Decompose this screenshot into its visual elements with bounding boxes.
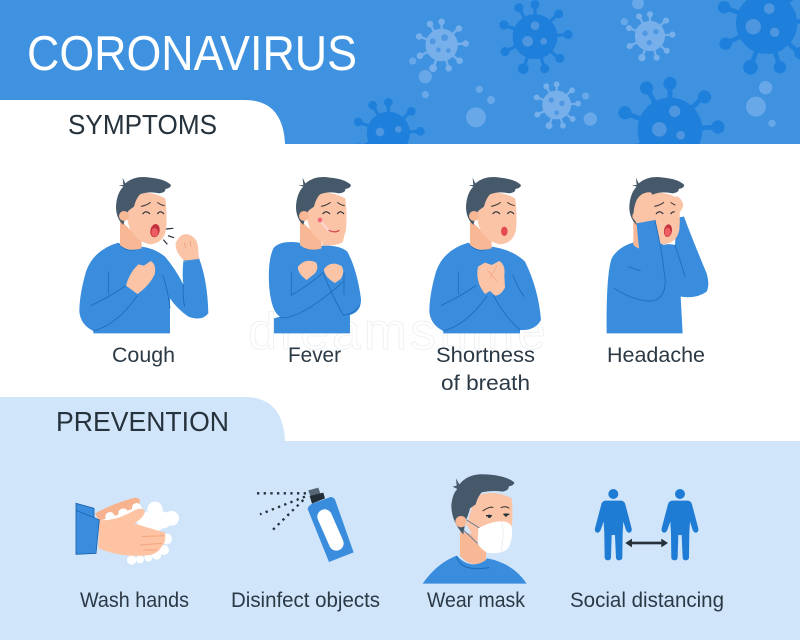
- label: social distancing: Social distancing: [570, 589, 724, 612]
- title: CORONAVIRUS: [27, 27, 357, 81]
- heading: prevention: PREVENTION: [56, 406, 229, 437]
- label: fever: Fever: [288, 344, 341, 367]
- prevention: social distancing: [570, 489, 724, 612]
- label: headache: Headache: [607, 344, 705, 367]
- heading: symptoms: SYMPTOMS: [68, 109, 217, 140]
- icon: soapy hands: [76, 498, 179, 565]
- prevention: disinfect objects: [231, 488, 380, 612]
- symptom: cough: [79, 177, 208, 367]
- symptom: fever: [269, 177, 361, 367]
- figure: man wearing mask: [423, 474, 527, 584]
- header banner: [0, 0, 800, 144]
- label: wash hands: Wash hands: [80, 589, 189, 612]
- icon: spray bottle: [257, 488, 354, 562]
- label: cough: Cough: [112, 344, 175, 367]
- figure: man holding head: [607, 177, 708, 333]
- figure: man with thermometer: [269, 177, 361, 333]
- label: shortness of breath: [436, 344, 535, 395]
- label: wear mask: Wear mask: [427, 589, 525, 612]
- figure: man holding chest: [429, 177, 541, 333]
- virus pattern: [354, 0, 800, 184]
- label: shortness of breath: of breath: [441, 372, 530, 395]
- prevention: wash hands: [76, 498, 189, 612]
- arrow: double-headed distance: [625, 539, 668, 547]
- prevention band: [0, 397, 800, 640]
- figure: coughing man: [79, 177, 208, 333]
- prevention: wear mask: [423, 474, 527, 612]
- label: shortness of breath: Shortness: [436, 344, 535, 367]
- watermark: dreamstime: [248, 303, 546, 361]
- symptoms tab: [0, 100, 285, 144]
- icon: two people with arrow: [595, 489, 698, 560]
- symptom: headache: [607, 177, 708, 367]
- icon: person left: [595, 489, 632, 560]
- symptom: shortness of breath: [429, 177, 541, 395]
- label: disinfect objects: Disinfect objects: [231, 589, 380, 612]
- icon: person right: [662, 489, 698, 560]
